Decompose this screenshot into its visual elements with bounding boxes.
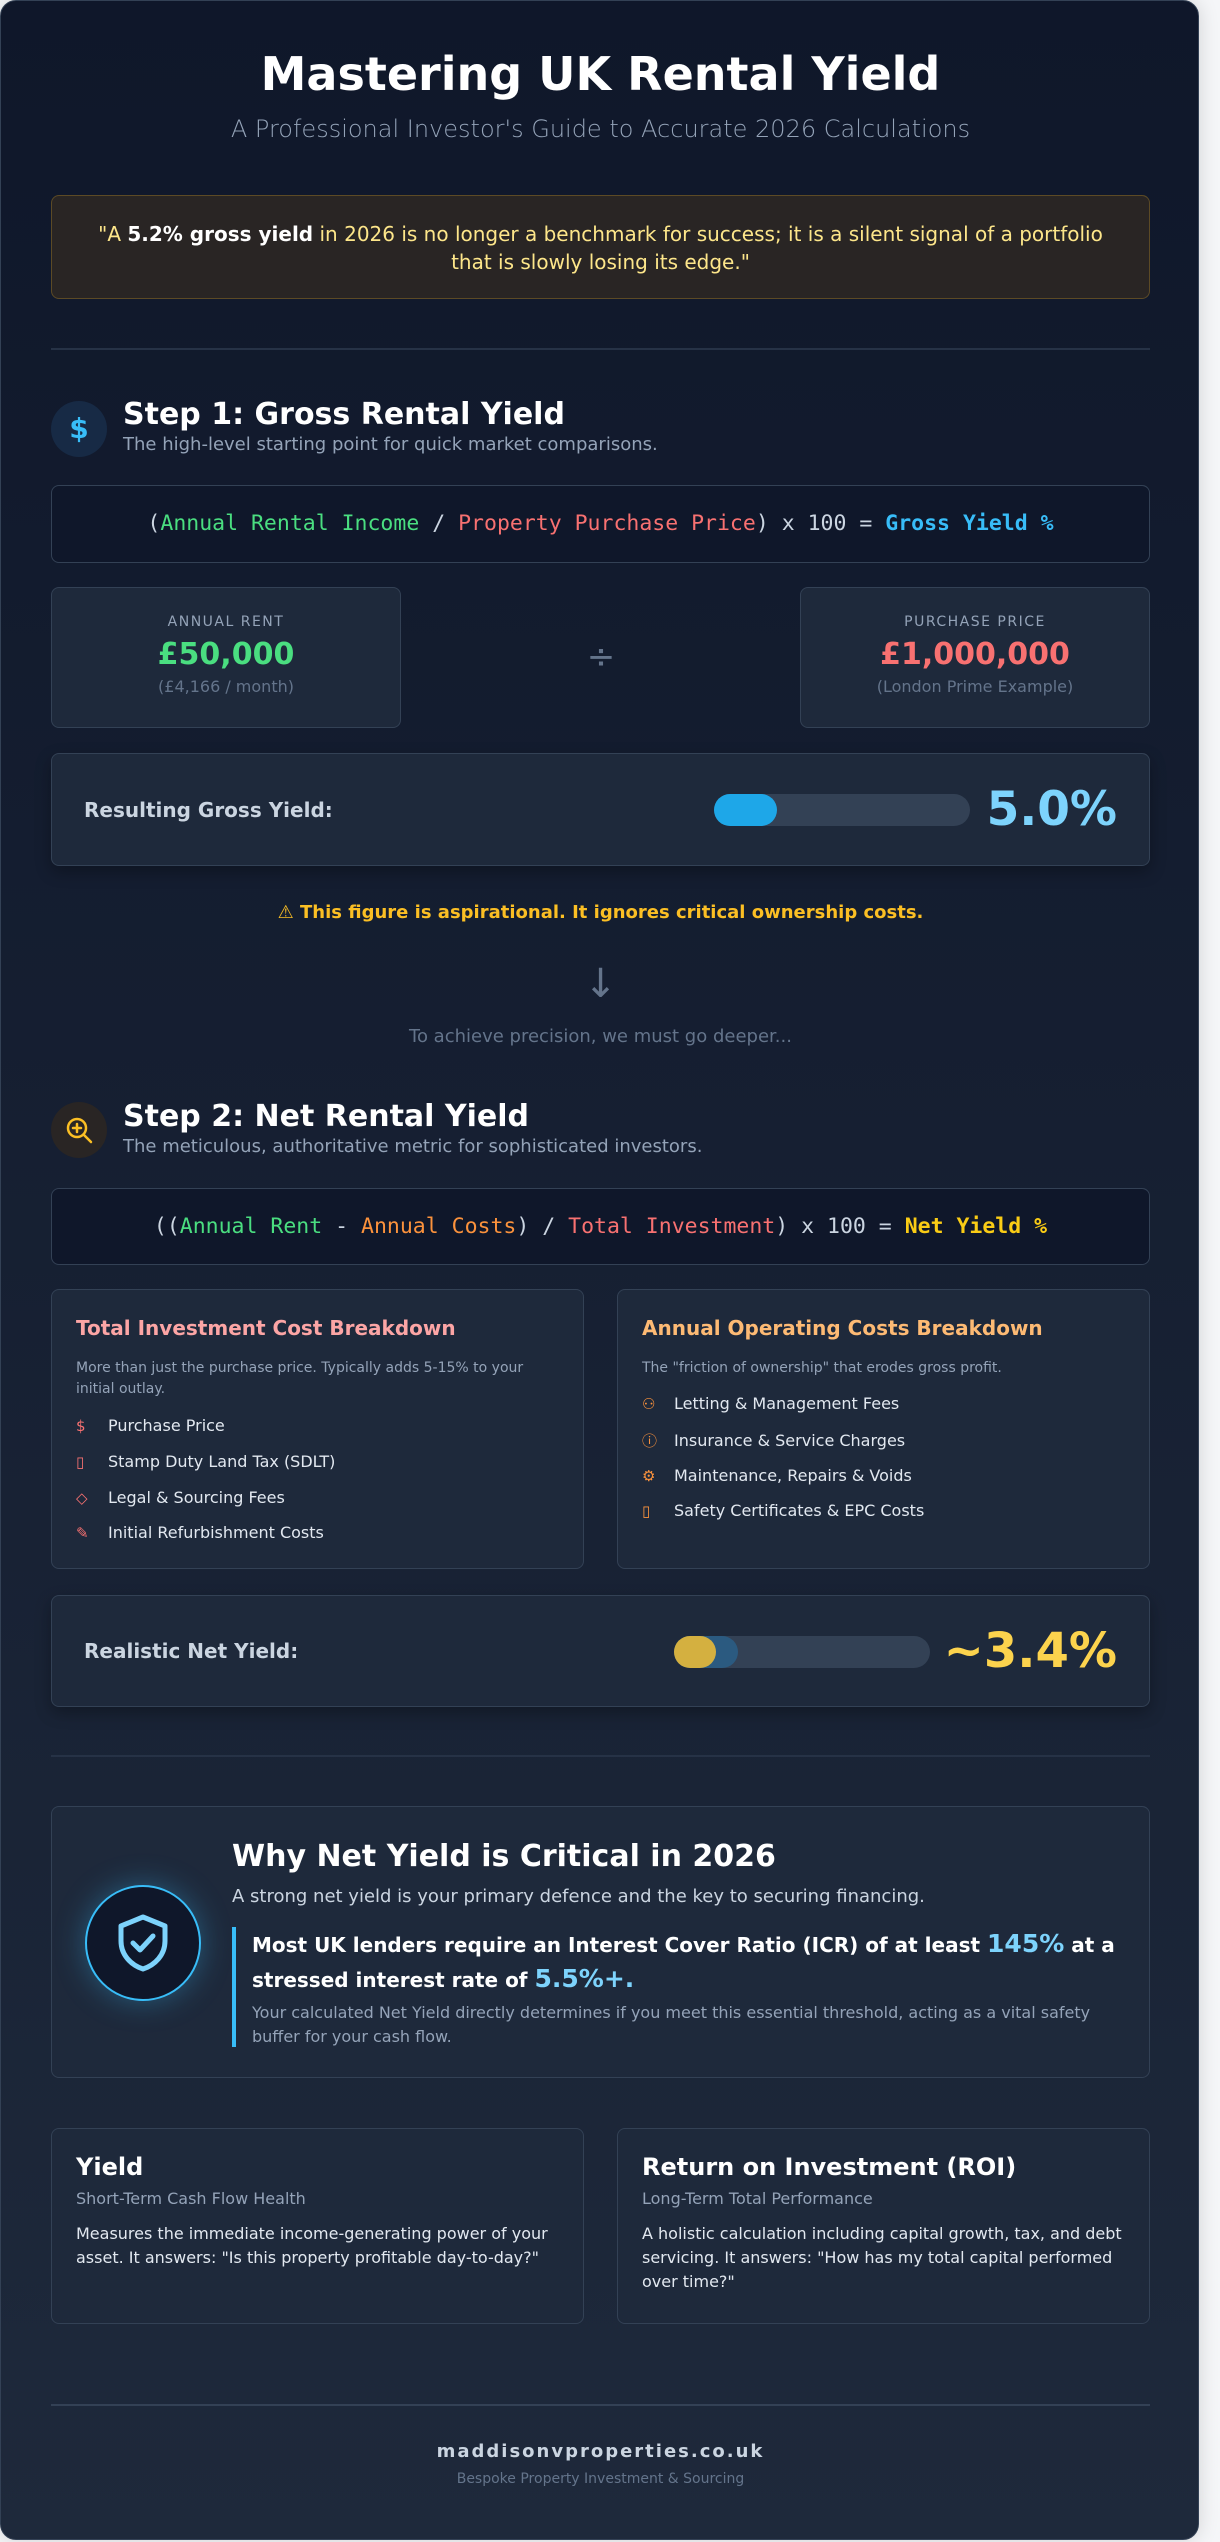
panel: annual operating costs xyxy=(617,1289,1150,1569)
formula: net xyxy=(51,1188,1150,1265)
panel: annual operating costs: Safety Certificates & EPC Costs xyxy=(674,1501,924,1520)
panel: total investment cost: ▯ xyxy=(76,1453,84,1471)
formula: net: ((Annual Rent - Annual Costs) / Total Investment) x 100 = Net Yield % xyxy=(154,1214,1047,1239)
card: ROI: Return on Investment (ROI) xyxy=(642,2153,1016,2181)
callout: ICR xyxy=(232,1927,1122,2047)
footer: maddisonvproperties.co.uk xyxy=(437,2441,764,2462)
result: gross yield: Resulting Gross Yield: xyxy=(84,798,333,822)
panel: annual operating costs: Insurance & Service Charges xyxy=(674,1431,905,1450)
card: annual rent: ANNUAL RENT xyxy=(168,614,284,630)
panel: annual operating costs: The "friction of ownership" that erodes gross profit. xyxy=(642,1360,1002,1376)
icon: step 2 xyxy=(51,1102,107,1158)
quote callout: that is slowly losing its edge." xyxy=(451,250,750,274)
panel: total investment cost: Stamp Duty Land Tax (SDLT) xyxy=(108,1452,335,1471)
footer xyxy=(437,2441,764,2487)
icon: shield xyxy=(85,1885,201,2001)
panel: annual operating costs: ⓘ xyxy=(642,1432,657,1450)
panel: total investment cost: Purchase Price xyxy=(108,1416,225,1435)
panel: why net yield critical: Why Net Yield is Critical in 2026 xyxy=(232,1839,776,1874)
result: net yield xyxy=(51,1595,1150,1707)
card: purchase price: PURCHASE PRICE xyxy=(904,614,1046,630)
result: gross yield xyxy=(51,753,1150,866)
card: annual rent: £50,000 xyxy=(158,637,294,672)
panel: total investment cost: More than just the purchase price. Typically adds 5-15% to your initial outlay. xyxy=(76,1360,523,1397)
heading: step 1: Step 1: Gross Rental Yield xyxy=(123,397,565,432)
heading: step 1: The high-level starting point for quick market comparisons. xyxy=(123,434,658,455)
formula: gross: (Annual Rental Income / Property Purchase Price) x 100 = Gross Yield % xyxy=(147,511,1054,536)
result: net yield: Realistic Net Yield: xyxy=(84,1639,298,1663)
card: purchase price: (London Prime Example) xyxy=(877,677,1073,696)
quote callout: "A 5.2% gross yield in 2026 is no longer a benchmark for success; it is a silent signal of a portfolio xyxy=(98,222,1103,246)
panel: total investment cost: Total Investment Cost Breakdown xyxy=(76,1316,456,1340)
panel: annual operating costs: Annual Operating Costs Breakdown xyxy=(642,1316,1043,1340)
heading: step 1 xyxy=(122,397,658,455)
callout: ICR: Your calculated Net Yield directly determines if you meet this essential threshold, acting as a vital safety buffer for your cash flow. xyxy=(252,2003,1090,2046)
card: ROI: Long-Term Total Performance xyxy=(642,2189,873,2208)
panel: total investment cost: ◇ xyxy=(76,1489,88,1507)
card: annual rent xyxy=(51,587,401,728)
card: purchase price xyxy=(800,587,1150,728)
icon: step 1: $ xyxy=(69,412,89,445)
heading: step 2 xyxy=(122,1099,702,1157)
panel: annual operating costs: ▯ xyxy=(642,1502,650,1520)
transition text: To achieve precision, we must go deeper... xyxy=(409,1026,792,1047)
panel: total investment cost: ✎ xyxy=(76,1524,89,1542)
card: yield: Yield xyxy=(76,2153,143,2181)
card: purchase price: £1,000,000 xyxy=(880,637,1070,672)
panel: total investment cost: $ xyxy=(76,1417,86,1435)
divide symbol: ÷ xyxy=(587,637,615,677)
subtitle: A Professional Investor's Guide to Accurate 2026 Calculations xyxy=(231,115,970,143)
panel: total investment cost xyxy=(51,1289,584,1569)
result: net yield: ~3.4% xyxy=(944,1623,1117,1679)
panel: total investment cost: Legal & Sourcing Fees xyxy=(108,1488,285,1507)
card: ROI: A holistic calculation including capital growth, tax, and debt servicing. It answers: "How has my total capital performed over time?" xyxy=(642,2224,1122,2291)
card: yield: Short-Term Cash Flow Health xyxy=(76,2189,306,2208)
title: Mastering UK Rental Yield xyxy=(261,47,940,101)
quote callout xyxy=(51,195,1150,299)
callout: ICR: Most UK lenders require an Interest Cover Ratio (ICR) of at least 145% at a stressed interest rate of 5.5%+. xyxy=(252,1929,1115,1993)
bar: net xyxy=(674,1636,930,1668)
card: yield: Measures the immediate income-generating power of your asset. It answers: "Is this property profitable day-to-day?" xyxy=(76,2224,548,2267)
footer: Bespoke Property Investment & Sourcing xyxy=(457,2471,744,2487)
bar: gross xyxy=(714,794,970,826)
panel: total investment cost: Initial Refurbishment Costs xyxy=(108,1523,324,1542)
heading: step 2: Step 2: Net Rental Yield xyxy=(123,1099,529,1134)
formula: gross xyxy=(51,485,1150,563)
panel: why net yield critical: A strong net yield is your primary defence and the key to securing financing. xyxy=(232,1886,925,1907)
panel: annual operating costs: Letting & Management Fees xyxy=(674,1394,899,1413)
card: yield xyxy=(51,2128,584,2324)
panel: why net yield critical xyxy=(51,1806,1150,2078)
result: gross yield: 5.0% xyxy=(987,782,1117,837)
warning: ⚠ This figure is aspirational. It ignores critical ownership costs. xyxy=(278,902,923,923)
icon: step 1 xyxy=(51,401,107,457)
panel: annual operating costs: ⚇ xyxy=(642,1395,655,1413)
card: annual rent: (£4,166 / month) xyxy=(158,677,294,696)
panel: annual operating costs: Maintenance, Repairs & Voids xyxy=(674,1466,912,1485)
card: ROI xyxy=(617,2128,1150,2324)
arrow: ↓ xyxy=(584,961,617,1007)
panel: annual operating costs: ⚙ xyxy=(642,1467,655,1485)
heading: step 2: The meticulous, authoritative metric for sophisticated investors. xyxy=(123,1136,702,1157)
